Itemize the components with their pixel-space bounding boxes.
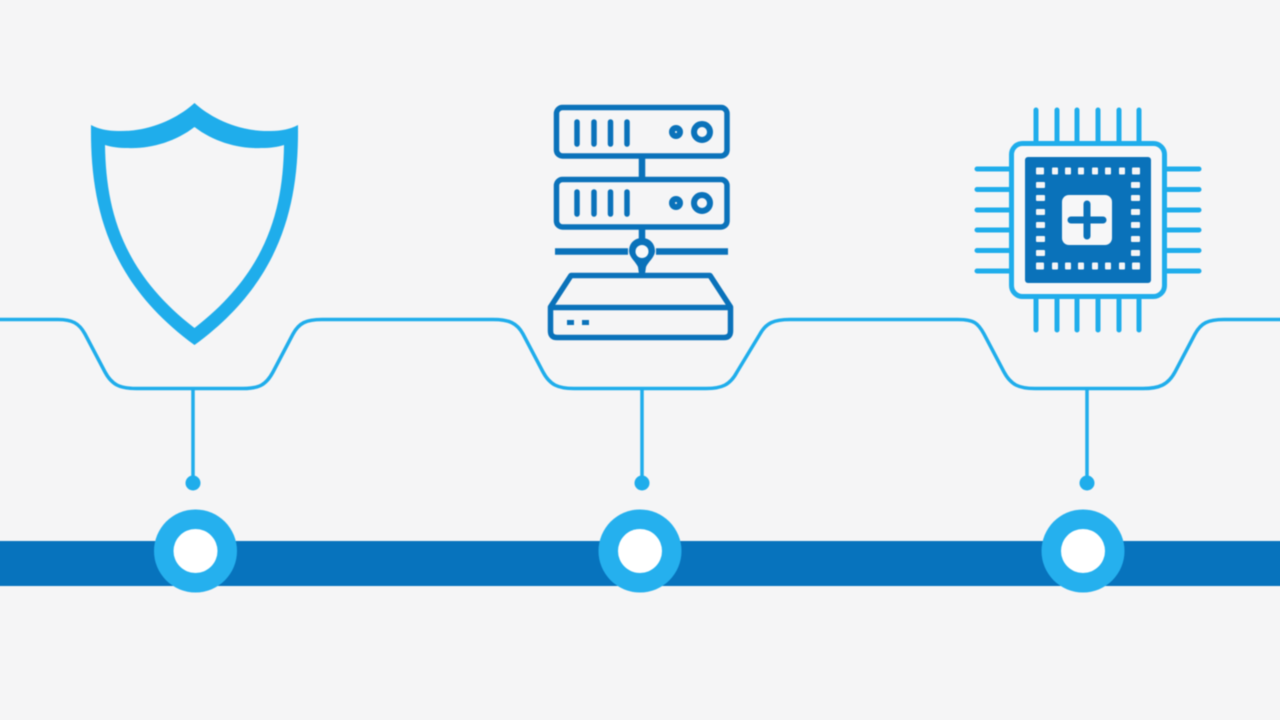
chip centre plus tile [1062,195,1112,245]
timeline node 1 [154,510,237,592]
timeline node 2 [598,510,682,592]
connector pin 3 [1080,389,1094,490]
wavy circuit line [0,320,1280,388]
icon: shield [91,103,298,345]
base unit [550,276,730,338]
connector between servers [639,158,645,177]
icon: server stack [550,108,730,338]
all artwork [0,103,1280,592]
server unit 1 [556,108,727,156]
server unit 2 [556,180,727,227]
connector pin 1 [186,389,200,490]
timeline node 3 [1042,510,1124,592]
chip pins [977,110,1199,330]
icon: processor chip [977,110,1199,330]
network node and line [555,229,728,274]
chip outer frame [1012,144,1164,296]
chip core [1025,157,1151,283]
timeline bar [0,541,1280,586]
chip core dots [1036,168,1140,270]
connector pin 2 [634,389,650,490]
